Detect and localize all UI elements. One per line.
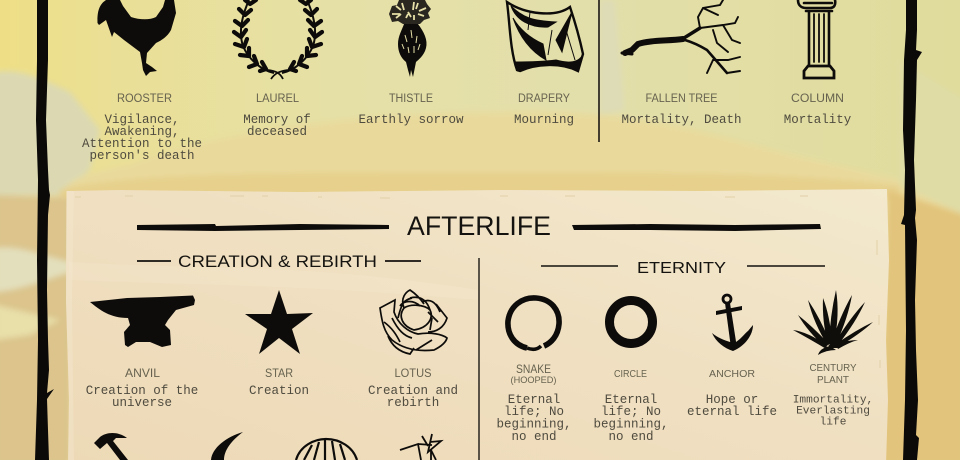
divider [598, 0, 600, 142]
icon: fallen tree [622, 0, 740, 73]
center divider [478, 258, 480, 460]
descriptions: eternity: Everlasting [796, 406, 870, 418]
descriptions: top symbols: Mortality, Death [621, 113, 742, 127]
labels: eternity: SNAKE [516, 364, 551, 376]
labels: creation and rebirth: STAR [265, 368, 293, 380]
icon: hammer [94, 433, 128, 460]
icon: thistle [389, 0, 431, 77]
descriptions: creation and rebirth: rebirth [387, 396, 439, 410]
icon: anvil [90, 296, 195, 347]
labels: top symbols: ROOSTER [117, 93, 172, 105]
descriptions: top symbols: Memory of [243, 113, 311, 127]
labels: eternity: (HOOPED) [510, 375, 557, 385]
labels: creation and rebirth [125, 368, 432, 380]
descriptions: creation and rebirth: Creation and [368, 384, 458, 398]
descriptions: eternity: Eternal [605, 393, 657, 407]
icon: laurel wreath [234, 0, 322, 79]
descriptions: top symbols: Earthly sorrow [358, 113, 464, 127]
labels: eternity [510, 362, 856, 386]
icon: circle [610, 300, 652, 344]
descriptions: top symbols [82, 113, 852, 163]
icon: lotus [380, 290, 447, 354]
labels: top symbols: FALLEN TREE [646, 93, 718, 105]
labels: top symbols: THISTLE [389, 93, 433, 105]
labels: top symbols [117, 93, 844, 105]
labels: top symbols: LAUREL [256, 93, 300, 105]
descriptions: eternity: beginning, [593, 418, 669, 432]
labels: eternity: PLANT [817, 374, 850, 386]
descriptions: eternity: no end [511, 430, 557, 444]
descriptions: eternity: eternal life [687, 405, 777, 419]
descriptions: eternity: Eternal [508, 393, 560, 407]
right border bar [901, 0, 922, 460]
labels: eternity: ANCHOR [709, 369, 755, 380]
icon: star [245, 290, 313, 354]
icon: shell [296, 439, 357, 460]
heading: afterlife: AFTERLIFE [407, 211, 551, 241]
icon: anchor [712, 295, 753, 351]
descriptions: creation and rebirth: universe [112, 396, 172, 410]
descriptions: creation and rebirth [86, 384, 458, 410]
panel: afterlife paper [66, 189, 889, 460]
icon: rooster [97, 0, 176, 76]
descriptions: eternity: Immortality, [793, 394, 873, 406]
descriptions: eternity: Hope or [706, 393, 758, 407]
icon: century plant [793, 290, 873, 355]
descriptions: eternity: no end [608, 430, 654, 444]
labels: top symbols: COLUMN [791, 93, 844, 105]
labels: creation and rebirth: LOTUS [394, 368, 432, 380]
left border bar [35, 0, 54, 460]
section: creation and rebirth [86, 252, 458, 460]
descriptions: creation and rebirth: Creation of the [86, 384, 198, 398]
heading: afterlife [137, 211, 821, 241]
descriptions: top symbols: Attention to the [82, 137, 202, 151]
labels: creation and rebirth: ANVIL [125, 368, 161, 380]
labels: eternity: CIRCLE [614, 369, 647, 380]
descriptions: top symbols: Vigilance, [104, 113, 180, 127]
descriptions: creation and rebirth: Creation [249, 384, 309, 398]
descriptions: top symbols: Awakening, [104, 125, 180, 139]
icon: column [798, 0, 835, 78]
subheading: creation and rebirth: CREATION & REBIRTH [178, 252, 377, 271]
icon: plant [400, 434, 441, 460]
subheading: eternity: ETERNITY [637, 260, 726, 277]
icon: drapery [507, 2, 583, 71]
descriptions: top symbols: person's death [89, 149, 195, 163]
descriptions: eternity: life; No [601, 405, 661, 419]
group: top symbols [82, 0, 852, 163]
descriptions: eternity [496, 393, 873, 444]
labels: eternity: CENTURY [810, 362, 856, 374]
descriptions: top symbols: Mourning [514, 113, 574, 127]
descriptions: top symbols: deceased [247, 125, 307, 139]
descriptions: top symbols: Mortality [784, 113, 852, 127]
icon: crescent moon [211, 432, 243, 460]
descriptions: eternity: life [820, 416, 846, 428]
section: eternity [496, 260, 873, 444]
labels: top symbols: DRAPERY [518, 93, 570, 105]
icon: snake hoop [508, 298, 559, 349]
descriptions: eternity: beginning, [496, 418, 572, 432]
descriptions: eternity: life; No [504, 405, 564, 419]
